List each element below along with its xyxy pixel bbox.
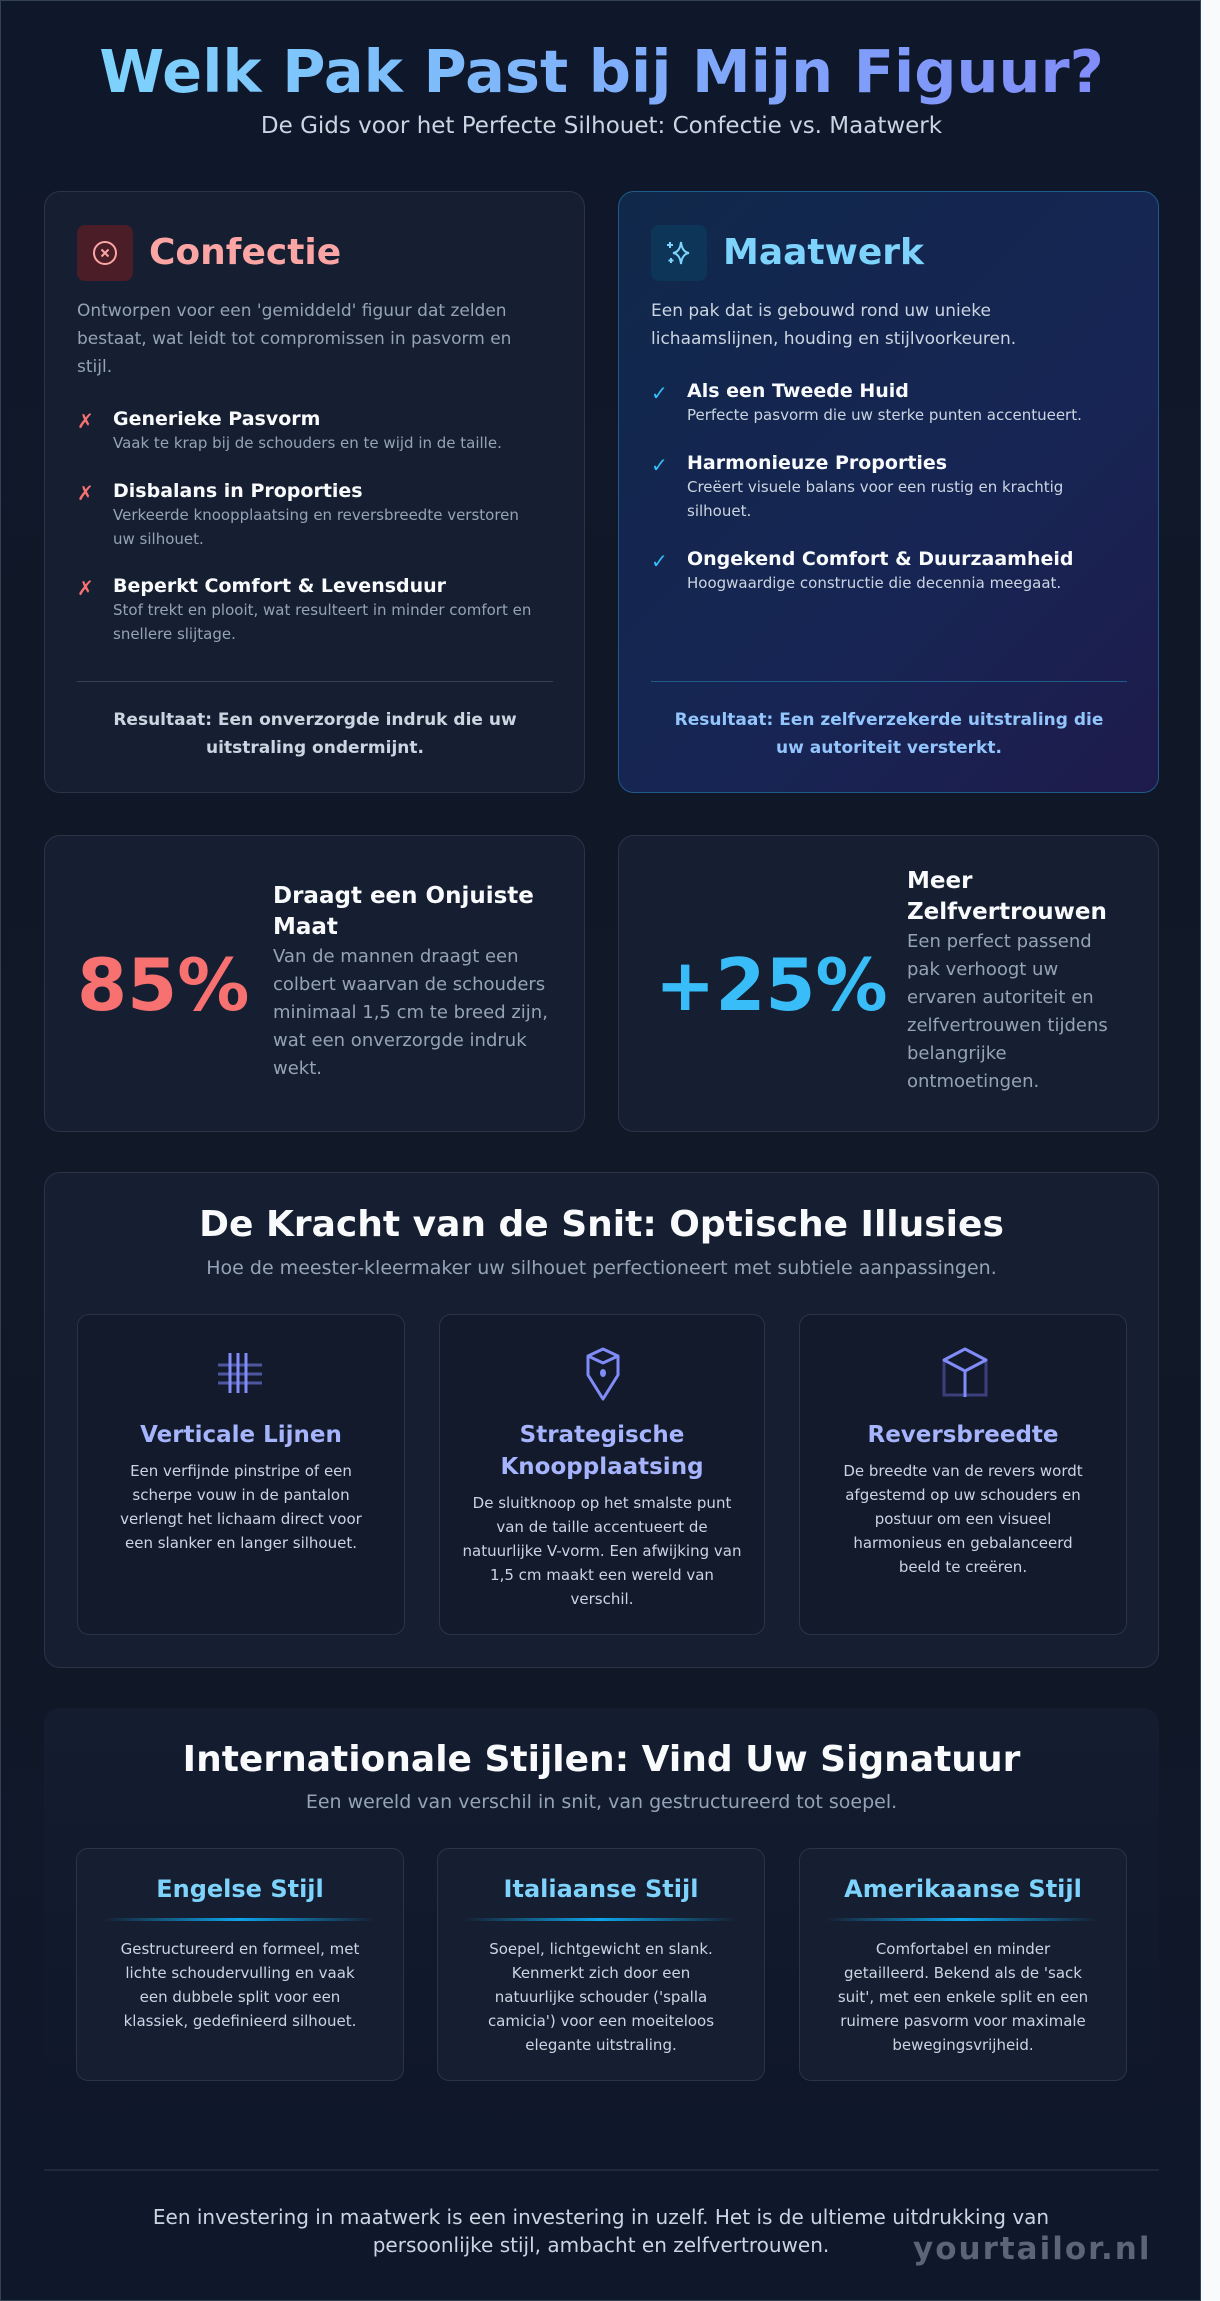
number +25%: +25% xyxy=(655,943,888,1027)
item: tweede huid xyxy=(651,380,1082,424)
subtitle: De Gids voor het Perfecte Silhouet: Confectie vs. Maatwerk xyxy=(261,113,942,139)
panel: optische illusies xyxy=(44,1172,1159,1668)
item: generieke pasvorm: Vaak te krap bij de schouders en te wijd in de taille. xyxy=(113,434,502,452)
list: confectie drawbacks: ✗ xyxy=(77,481,94,505)
list: maatwerk benefits: ✓ xyxy=(651,549,668,573)
text: Gestructureerd en formeel, met lichte schoudervulling en vaak een dubbele split voor een klassiek, gedefinieerd silhouet. xyxy=(121,1940,359,2030)
icon: pen nib xyxy=(586,1348,620,1401)
subheading: Hoe de meester-kleermaker uw silhouet perfectioneert met subtiele aanpassingen. xyxy=(206,1257,997,1279)
text: confectie result: Resultaat: Een onverzorgde indruk die uw uitstraling ondermijnt. xyxy=(113,710,517,758)
text: Soepel, lichtgewicht en slank. Kenmerkt zich door een natuurlijke schouder ('spalla camicia') voor een moeiteloos elegante uitstraling. xyxy=(488,1940,714,2054)
item: comfort: Stof trekt en plooit, wat resulteert in minder comfort en snellere slijtage. xyxy=(113,601,531,643)
card: italiaanse stijl xyxy=(437,1848,765,2081)
panel: maatwerk xyxy=(618,191,1159,793)
icon: lines xyxy=(218,1353,262,1393)
item: comfort: Hoogwaardige constructie die decennia meegaat. xyxy=(687,574,1061,592)
text: stat description: Draagt een Onjuiste Maat xyxy=(273,883,534,940)
card: reversbreedte xyxy=(799,1314,1127,1635)
item: tweede huid: Als een Tweede Huid xyxy=(687,380,909,402)
item: comfort xyxy=(651,548,1074,592)
title: Italiaanse Stijl xyxy=(504,1875,698,1903)
text: maatwerk intro: Een pak dat is gebouwd rond uw unieke lichaamslijnen, houding en stijlvoorkeuren. xyxy=(651,301,1016,349)
text: stat description: Van de mannen draagt een colbert waarvan de schouders minimaal 1,5 cm te breed zijn, wat een onverzorgde indruk wekt. xyxy=(273,946,548,1079)
number 85%: 85% xyxy=(77,943,249,1027)
text: ruimere pasvorm voor maximale xyxy=(840,2012,1086,2030)
item: disbalans xyxy=(77,480,519,548)
text xyxy=(838,1940,1088,2054)
list: maatwerk benefits: ✓ xyxy=(651,453,668,477)
item: proporties: Harmonieuze Proporties xyxy=(687,452,947,474)
item: disbalans: Verkeerde knoopplaatsing en reversbreedte verstoren uw silhouet. xyxy=(113,506,519,548)
card: verticale lijnen xyxy=(77,1314,405,1635)
footer text: Een investering in maatwerk is een investering in uzelf. Het is de ultieme uitdrukking van persoonlijke stijl, ambacht en zelfvertrouwen. xyxy=(153,2205,1049,2257)
stat: +25% xyxy=(618,835,1159,1132)
text: Comfortabel en minder xyxy=(876,1940,1050,1958)
card: engelse stijl xyxy=(76,1848,404,2081)
text: stat description: Een perfect passend pak verhoogt uw ervaren autoriteit en zelfvertrouwen tijdens belangrijke ontmoetingen. xyxy=(907,931,1108,1092)
icon: cube xyxy=(942,1348,988,1397)
text: De breedte van de revers wordt afgestemd op uw schouders en postuur om een visueel harmonieus en gebalanceerd beeld te creëren. xyxy=(843,1462,1083,1576)
subheading: Een wereld van verschil in snit, van gestructureerd tot soepel. xyxy=(306,1791,897,1813)
heading: Internationale Stijlen: Vind Uw Signatuur xyxy=(183,1739,1020,1780)
text: suit', met een enkele split en een xyxy=(838,1988,1088,2006)
title: Engelse Stijl xyxy=(156,1875,324,1903)
item: proporties xyxy=(651,452,1063,520)
heading: Maatwerk: Maatwerk xyxy=(723,232,924,273)
watermark: yourtailor.nl xyxy=(913,2231,1152,2267)
text: stat description: Meer Zelfvertrouwen xyxy=(907,868,1107,925)
title: Verticale Lijnen xyxy=(140,1422,342,1448)
title: Amerikaanse Stijl xyxy=(844,1875,1082,1903)
text: maatwerk result: Resultaat: Een zelfverzekerde uitstraling die uw autoriteit versterkt. xyxy=(675,710,1103,758)
card: knoopplaatsing xyxy=(439,1314,765,1635)
heading: Confectie: Confectie xyxy=(149,232,341,273)
item: comfort: Beperkt Comfort & Levensduur xyxy=(113,575,446,597)
panel: confectie xyxy=(44,191,585,793)
title: Reversbreedte xyxy=(868,1422,1058,1448)
heading: De Kracht van de Snit: Optische Illusies xyxy=(199,1204,1004,1245)
list: confectie drawbacks: ✗ xyxy=(77,576,94,600)
text: De sluitknoop op het smalste punt van de taille accentueert de natuurlijke V-vorm. Een afwijking van 1,5 cm maakt een wereld van verschil. xyxy=(463,1494,741,1608)
list: maatwerk benefits xyxy=(651,380,1082,592)
icon: cross circle xyxy=(77,225,133,281)
list: confectie drawbacks xyxy=(77,408,531,643)
list: maatwerk benefits: ✓ xyxy=(651,381,668,405)
item: disbalans: Disbalans in Proporties xyxy=(113,480,363,502)
stat: 85% xyxy=(44,835,585,1132)
title: Strategische Knoopplaatsing xyxy=(500,1422,704,1480)
item: proporties: Creëert visuele balans voor een rustig en krachtig silhouet. xyxy=(687,478,1063,520)
text: stat description xyxy=(273,883,548,1079)
text: confectie intro: Ontworpen voor een 'gemiddeld' figuur dat zelden bestaat, wat leidt tot compromissen in pasvorm en stijl. xyxy=(77,301,511,377)
card: amerikaanse stijl xyxy=(799,1848,1127,2081)
icon: sparkles xyxy=(651,225,707,281)
item: generieke pasvorm: Generieke Pasvorm xyxy=(113,408,320,430)
panel: internationale stijlen xyxy=(44,1708,1159,2088)
item: comfort: Ongekend Comfort & Duurzaamheid xyxy=(687,548,1074,570)
text: getailleerd. Bekend als de 'sack xyxy=(844,1964,1082,1982)
list: confectie drawbacks: ✗ xyxy=(77,409,94,433)
text: bewegingsvrijheid. xyxy=(892,2036,1034,2054)
text: Een verfijnde pinstripe of een scherpe vouw in de pantalon verlengt het lichaam direct voor een slanker en langer silhouet. xyxy=(120,1462,362,1552)
item: tweede huid: Perfecte pasvorm die uw sterke punten accentueert. xyxy=(687,406,1082,424)
item: generieke pasvorm xyxy=(77,408,502,452)
title: Welk Pak Past bij Mijn Figuur? xyxy=(99,37,1104,106)
item: comfort xyxy=(77,575,531,643)
